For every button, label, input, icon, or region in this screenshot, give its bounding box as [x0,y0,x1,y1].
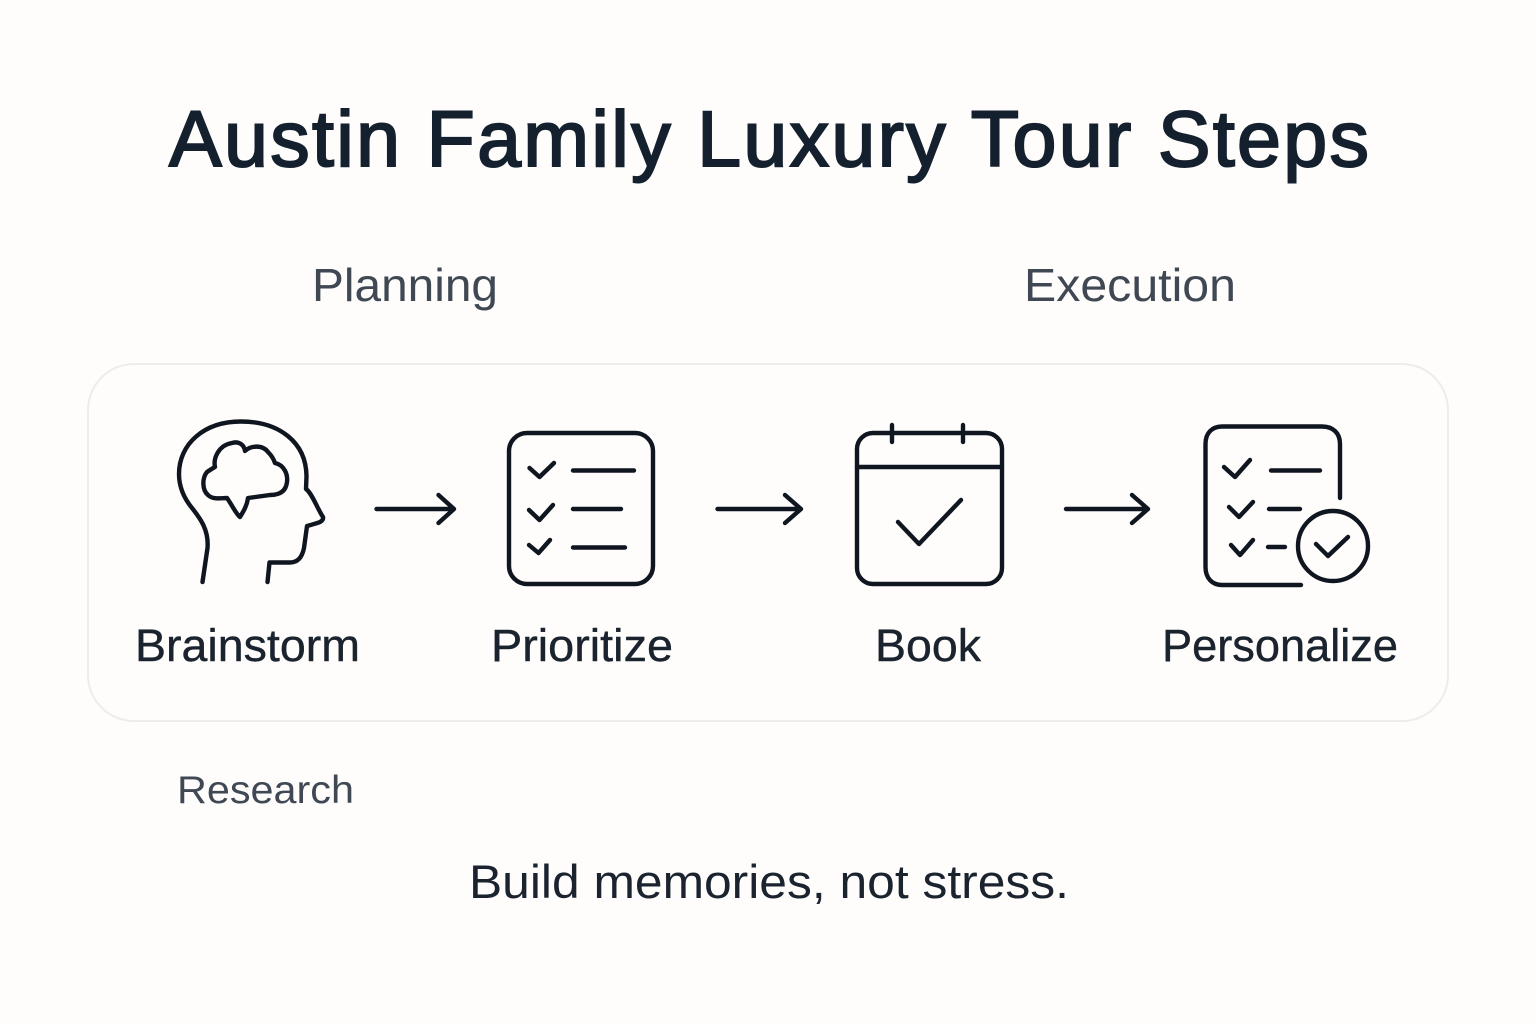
label: book: Book [875,620,982,671]
label: brainstorm: Brainstorm [135,620,360,671]
icon: head with brain [179,422,323,582]
icon: checklist [509,433,653,584]
title: Austin Family Luxury Tour Steps [169,94,1369,183]
label: prioritize: Prioritize [491,620,673,671]
heading: planning: Planning [312,259,498,311]
arrow: prioritize to book [718,495,801,523]
icon: checklist with check badge [1206,426,1368,585]
label: research: Research [177,769,354,812]
arrow: book to personalize [1066,495,1148,523]
tagline: Build memories, not stress. [469,855,1069,908]
arrow: brainstorm to prioritize [376,495,454,523]
label: personalize: Personalize [1162,620,1398,671]
icon: calendar with check [857,425,1002,584]
panel: steps [88,364,1448,721]
heading: execution: Execution [1024,259,1236,311]
